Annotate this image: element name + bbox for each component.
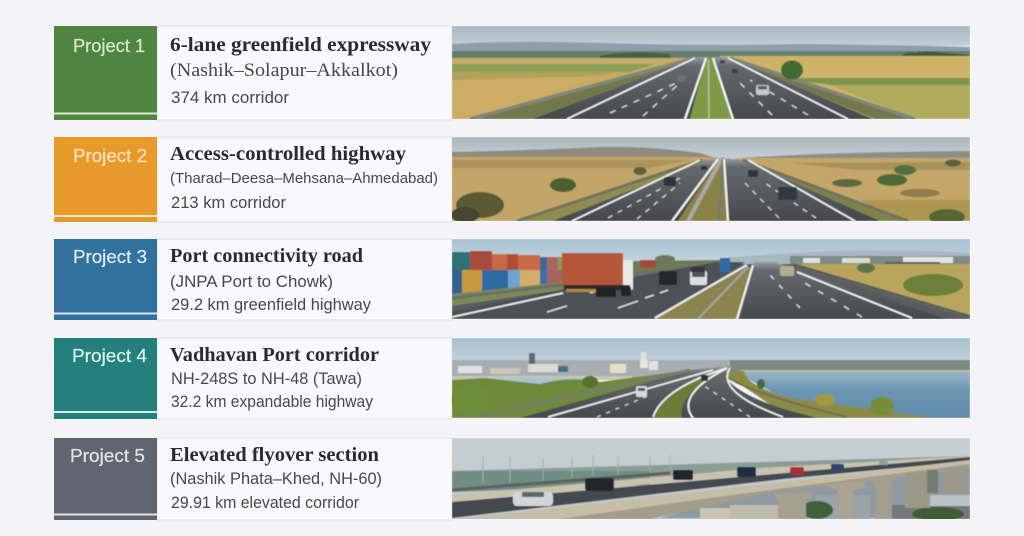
panel: project 2 bbox=[54, 137, 970, 225]
photo 1: expressway through fields bbox=[452, 26, 970, 119]
heading 1: 6-lane greenfield expressway bbox=[170, 34, 431, 56]
text card 5 bbox=[157, 438, 452, 520]
length 5: 29.91 km elevated corridor bbox=[171, 494, 359, 512]
photo 5: elevated flyover bbox=[452, 438, 970, 521]
length 1: 374 km corridor bbox=[171, 89, 290, 107]
heading 3: Port connectivity road bbox=[170, 245, 363, 267]
text card 4 bbox=[157, 338, 452, 419]
colour block 3 bbox=[54, 239, 157, 320]
colour block 4 bbox=[54, 338, 157, 419]
route 4: NH-248S to NH-48 (Tawa) bbox=[171, 370, 362, 388]
colour block 1 bbox=[54, 26, 157, 120]
length 3: 29.2 km greenfield highway bbox=[171, 296, 372, 314]
route 3: (JNPA Port to Chowk) bbox=[170, 273, 333, 291]
project label 4: Project 4 bbox=[72, 345, 147, 366]
route 2: (Tharad–Deesa–Mehsana–Ahmedabad) bbox=[170, 170, 438, 187]
colour block 2 bbox=[54, 137, 157, 222]
panel: project 3 bbox=[54, 239, 970, 320]
project label 5: Project 5 bbox=[70, 445, 145, 466]
route 1: (Nashik–Solapur–Akkalkot) bbox=[170, 60, 398, 81]
panel: project 1 bbox=[54, 26, 970, 120]
length 4: 32.2 km expandable highway bbox=[171, 393, 374, 411]
heading 2: Access-controlled highway bbox=[170, 143, 406, 165]
project label 1: Project 1 bbox=[73, 35, 145, 56]
colour block 5 bbox=[54, 438, 157, 520]
project label 3: Project 3 bbox=[73, 246, 147, 267]
photo 2: highway across dry grassland bbox=[451, 137, 970, 225]
text card 3 bbox=[157, 239, 452, 320]
text card 2 bbox=[157, 137, 452, 222]
panel: project 5 bbox=[54, 438, 970, 521]
project label 2: Project 2 bbox=[73, 145, 147, 166]
photo 4: curved coastal road by port bbox=[450, 338, 970, 418]
length 2: 213 km corridor bbox=[171, 194, 287, 212]
text card 1 bbox=[157, 26, 452, 120]
heading 5: Elevated flyover section bbox=[170, 444, 379, 466]
heading 4: Vadhavan Port corridor bbox=[170, 344, 379, 366]
photo 3: port road with containers and truck bbox=[452, 239, 970, 319]
panel: project 4 bbox=[54, 338, 970, 419]
route 5: (Nashik Phata–Khed, NH-60) bbox=[170, 470, 382, 488]
